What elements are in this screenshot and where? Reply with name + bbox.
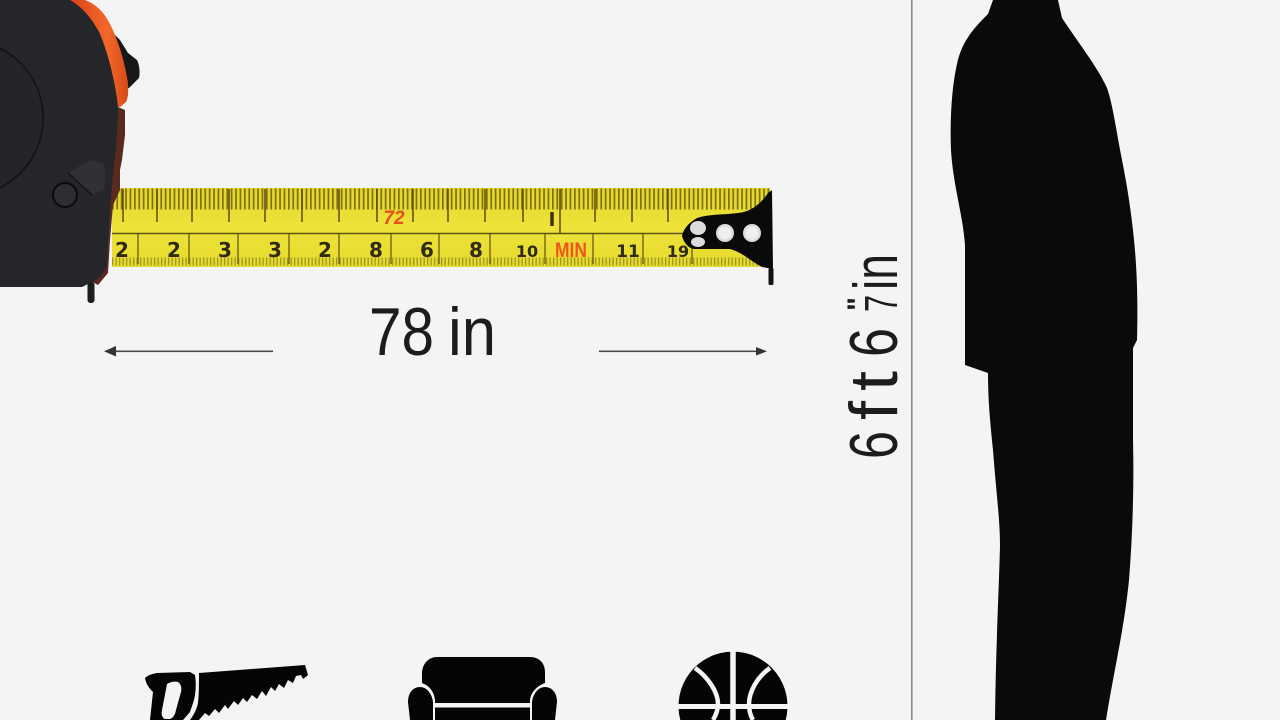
measurement label: 78 in: in [448,294,496,370]
tape blade [112,188,770,267]
measurement label: 78 in: 78 [369,294,434,370]
icon: basketball [677,651,789,720]
tape numbers [115,238,689,262]
left arrow [104,346,273,356]
tape numbers: 6 [420,238,434,262]
height label: 6 ft 6 7 in: " [842,297,875,311]
button [53,183,77,207]
case body [0,0,118,287]
tape numbers: 19 [667,242,689,261]
vertical divider line [911,0,913,720]
tape numbers: 8 [369,238,383,262]
height label: 6 ft 6 7 in: t [836,371,912,391]
tape numbers: 8 [469,238,483,262]
tape numbers: 10 [516,242,538,261]
red tape marking: 72 [383,208,405,229]
icon: armchair [408,657,557,720]
height label: 6 ft 6 7 in [836,254,912,459]
height label: 6 ft 6 7 in: 7 [855,295,907,312]
height label: 6 ft 6 7 in: in [842,254,911,290]
height label: 6 ft 6 7 in: 6 [836,431,912,459]
person silhouette [951,0,1137,720]
icon: hand saw [145,665,308,720]
tape measure housing [0,0,140,303]
height label: 6 ft 6 7 in: f [836,401,912,420]
foot pin [88,282,94,303]
side trim [88,107,125,285]
measurement label: 78 in [369,294,496,370]
tape numbers: 2 [167,238,181,262]
tape numbers: 3 [268,238,282,262]
right arrow [599,347,767,356]
locking knob [113,33,140,88]
lever [68,160,105,195]
height label: 6 ft 6 7 in: 6 [836,328,912,357]
red MIN marking: MIN [555,239,587,262]
tape numbers: 3 [218,238,232,262]
tape numbers: 11 [616,242,640,262]
tape numbers: 2 [318,238,332,262]
tape hook [682,190,774,285]
case dial ring [0,48,43,188]
tape numbers: 2 [115,238,129,262]
orange bumper [68,0,128,107]
